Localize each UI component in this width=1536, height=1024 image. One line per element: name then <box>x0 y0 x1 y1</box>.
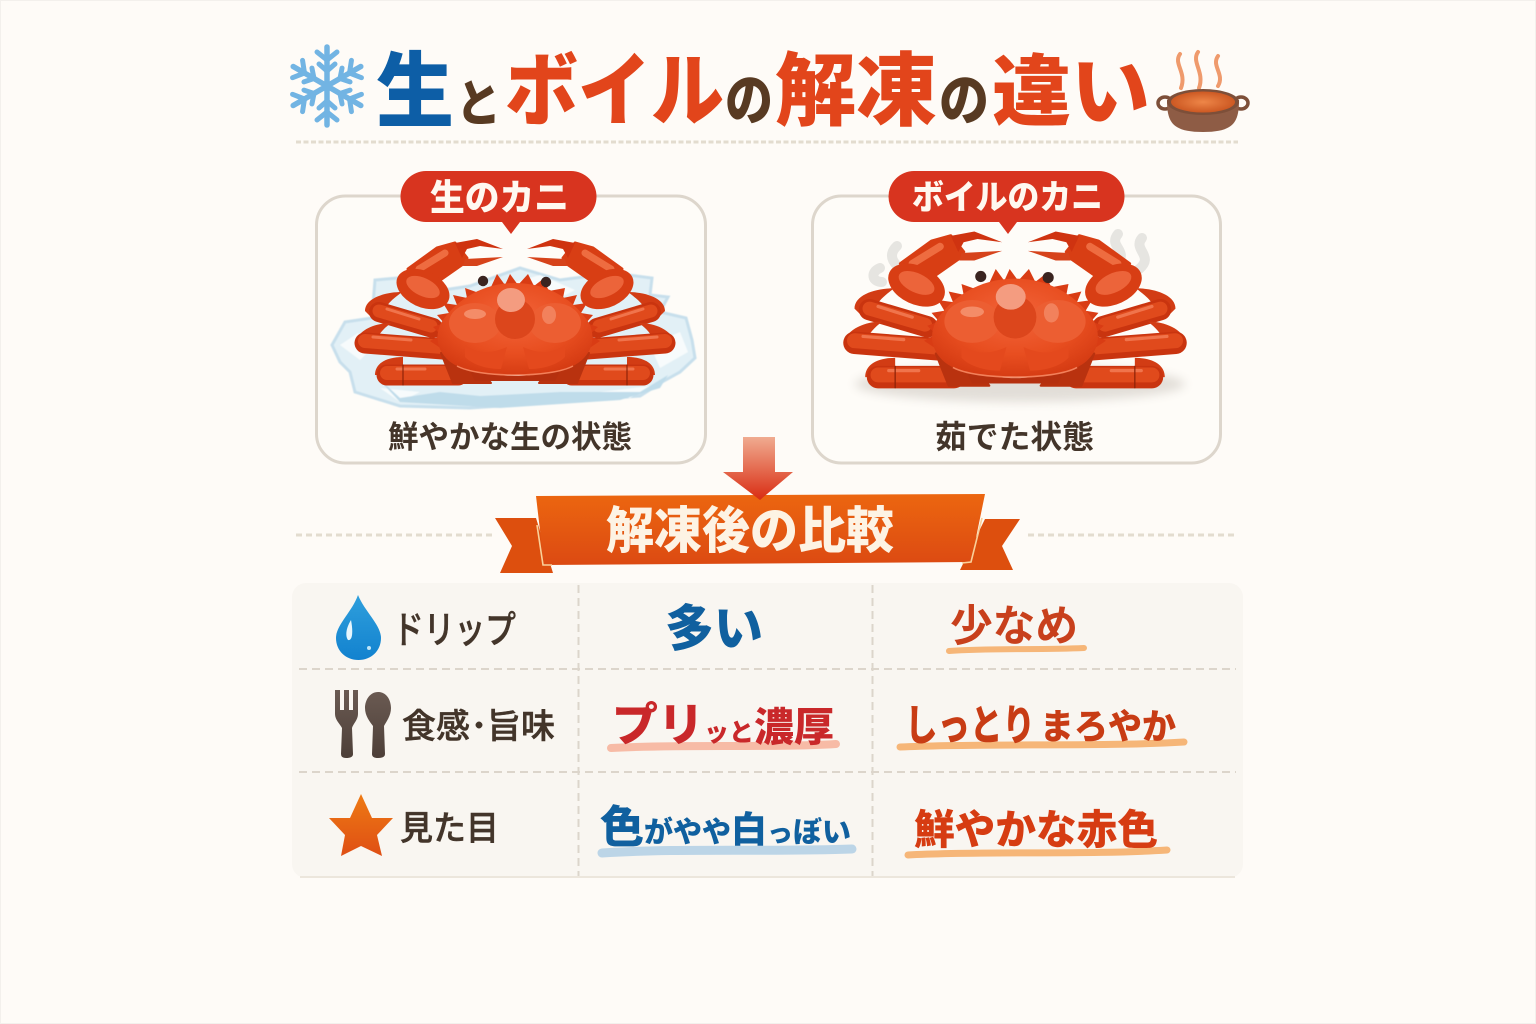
boiled value: 鮮やかな赤色 <box>914 807 1158 853</box>
boiled value: 少なめ <box>950 603 1078 651</box>
table background <box>292 583 1243 878</box>
label bubble: 生のカニ <box>430 177 569 218</box>
table shadow <box>855 366 1185 402</box>
raw value: 多い <box>665 601 763 657</box>
label bubble <box>889 171 1124 234</box>
ribbon body <box>536 494 985 565</box>
banner: comparison after thawing <box>495 494 1020 573</box>
row label: ドリップ <box>393 610 516 652</box>
icon: fork and spoon <box>335 690 391 758</box>
icon: snowflake <box>293 47 361 125</box>
row label: 旨味 <box>487 708 555 746</box>
panel frame <box>316 196 706 463</box>
title text <box>376 47 1150 138</box>
title text: と <box>456 76 501 132</box>
panel: raw crab <box>316 171 706 463</box>
label bubble: ボイルのカニ <box>912 179 1103 217</box>
raw value: 色がやや白っぼい <box>600 803 851 852</box>
caption: 茹でた状態 <box>935 419 1094 455</box>
ribbon tails <box>495 518 1020 573</box>
table bottom edge <box>300 876 1235 878</box>
arrow <box>723 437 793 500</box>
ice bed <box>332 268 695 408</box>
title text: の <box>939 69 989 132</box>
boiled value: しっとり <box>905 702 1035 749</box>
grid lines <box>299 585 1236 876</box>
boiled value <box>900 702 1184 749</box>
title text: 違い <box>992 48 1150 136</box>
steam wisps <box>873 234 1145 282</box>
icon: star <box>329 794 393 856</box>
panel frame <box>812 196 1220 463</box>
row label: 食感 <box>402 708 470 746</box>
row label: 見た目 <box>400 810 499 848</box>
icon: water drop <box>336 595 381 660</box>
caption: 鮮やかな生の状態 <box>388 420 632 455</box>
banner heading: 解凍後の比較 <box>606 503 894 559</box>
raw value: プリッと濃厚 <box>612 699 834 751</box>
raw crab illustration <box>355 239 675 385</box>
row label <box>402 708 555 746</box>
section divider left <box>296 534 495 536</box>
row: drip <box>336 595 1084 660</box>
section divider right <box>1028 534 1238 536</box>
label bubble <box>401 171 597 234</box>
title text: ボイル <box>505 47 724 136</box>
comparison table <box>292 583 1243 878</box>
title divider <box>296 140 1238 144</box>
ribbon edge highlights <box>537 518 982 565</box>
row: appearance <box>329 794 1167 856</box>
title text: 解凍 <box>775 47 937 136</box>
title <box>293 47 1248 138</box>
panel: boiled crab <box>812 171 1220 463</box>
row: texture and flavour <box>335 690 1184 758</box>
boiled crab illustration <box>844 232 1186 388</box>
boiled value: まろやか <box>1040 708 1176 747</box>
title text: の <box>725 69 773 132</box>
icon: hot pot <box>1158 52 1248 132</box>
title text: 生 <box>376 47 454 138</box>
